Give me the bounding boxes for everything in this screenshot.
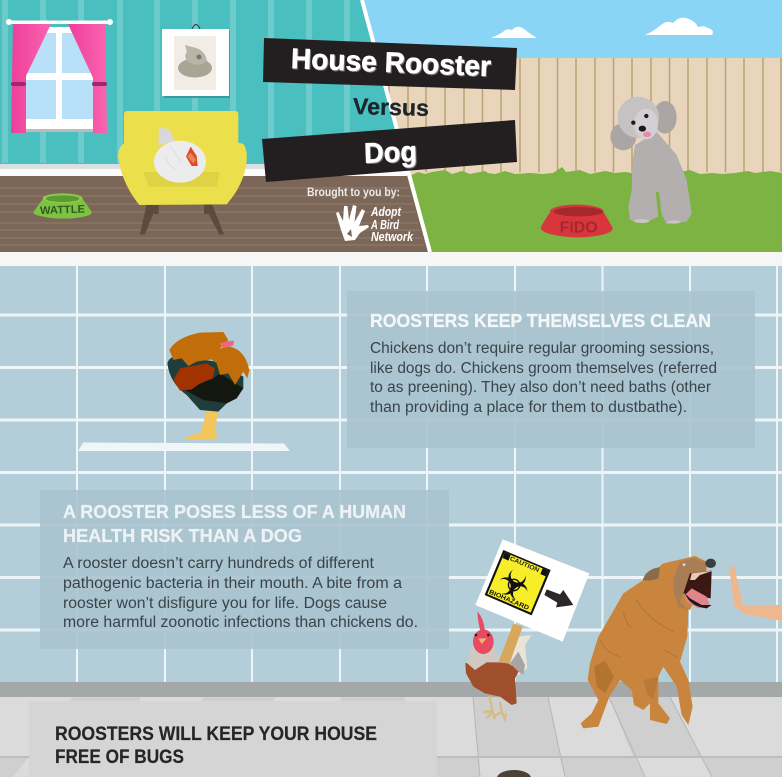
heading: ROOSTERS WILL KEEP YOUR HOUSE	[55, 724, 377, 745]
biohazard sign: CAUTION	[509, 555, 541, 574]
sign board	[475, 539, 589, 642]
text panel: free of bugs	[29, 701, 437, 777]
white divider	[362, 0, 430, 252]
title banner: Dog: Dog	[363, 136, 418, 170]
cloud left	[491, 27, 537, 38]
human hand	[729, 566, 782, 621]
title: Versus: Versus	[353, 93, 429, 121]
snarling brown dog	[581, 556, 716, 728]
framed chicken picture	[162, 24, 230, 98]
body copy	[370, 340, 717, 416]
heading	[55, 724, 377, 768]
wood floor	[0, 176, 428, 252]
green bowl: WATTLE: WATTLE	[40, 204, 85, 217]
rooster	[465, 612, 532, 719]
tiled bathroom wall	[0, 266, 782, 683]
floor with baseboard	[0, 682, 782, 777]
sign post	[499, 623, 523, 664]
room wall	[0, 0, 407, 176]
heading: FREE OF BUGS	[55, 747, 184, 768]
biohazard sign: BIOHAZARD	[488, 589, 530, 612]
body copy: pathogenic bacteria in their mouth. A bite from a	[63, 575, 402, 592]
title banner: House Rooster: House Rooster	[290, 43, 492, 83]
biohazard sign	[485, 550, 551, 615]
yellow armchair with white chicken	[118, 111, 247, 234]
body copy: to as preening). They also don’t need baths (other	[370, 379, 711, 396]
body copy: A rooster doesn’t carry hundreds of different	[63, 555, 375, 572]
organisation name: Network	[371, 230, 414, 244]
title banner: House Rooster	[263, 38, 517, 90]
body copy: rooster won’t disfigure you for life. Dogs cause	[63, 595, 387, 612]
window with curtains	[6, 19, 113, 133]
header scene	[0, 0, 782, 252]
heading: A ROOSTER POSES LESS OF A HUMAN	[63, 501, 406, 522]
heading: ROOSTERS KEEP THEMSELVES CLEAN	[370, 310, 711, 331]
title banner: House Rooster: House Rooster	[291, 44, 492, 84]
green bowl: WATTLE	[33, 193, 92, 219]
rooster holding sign	[465, 539, 589, 719]
yard background	[340, 0, 782, 252]
shelf	[78, 442, 290, 451]
icon: white hand logo	[336, 205, 369, 241]
title banner: Dog	[262, 120, 517, 182]
rooster from behind on shelf	[167, 332, 249, 440]
white hen	[154, 127, 206, 183]
organisation name: A Bird	[370, 218, 399, 232]
red bowl: FIDO: FIDO	[560, 220, 598, 237]
organisation name: Adopt	[370, 205, 402, 219]
title banner: Dog: Dog	[365, 137, 419, 171]
organisation name	[370, 205, 414, 244]
next hen head peeking at bottom	[497, 770, 531, 777]
credit line: Brought to you by:	[307, 185, 400, 199]
heading	[63, 501, 406, 546]
body copy: like dogs do. Chickens groom themselves (referred	[370, 360, 717, 377]
text panel: roosters keep themselves clean	[347, 291, 755, 448]
body copy: than providing a place for them to dustbathe).	[370, 399, 687, 416]
body copy	[63, 555, 418, 631]
icon: biohazard symbol	[496, 568, 528, 601]
heading: HEALTH RISK THAN A DOG	[63, 525, 302, 546]
arrow	[544, 589, 573, 607]
grey poodle	[610, 97, 692, 224]
body copy: more harmful zoonotic infections than chickens do.	[63, 614, 418, 631]
text panel: human health risk	[40, 490, 449, 649]
cloud right	[645, 18, 713, 35]
red bowl: FIDO	[541, 205, 613, 237]
body copy: Chickens don’t require regular grooming sessions,	[370, 340, 714, 357]
